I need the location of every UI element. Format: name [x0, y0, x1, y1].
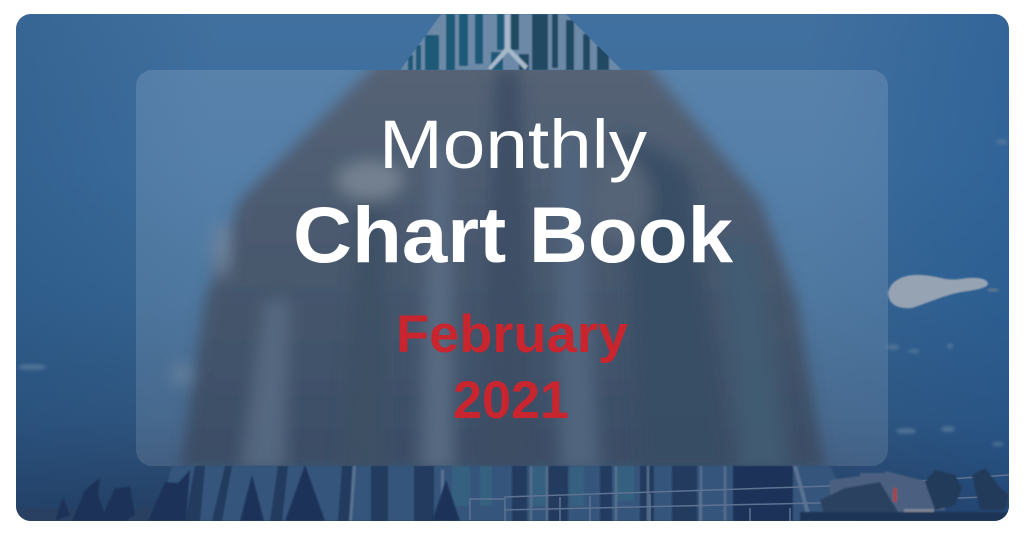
blurred building behind panel: [173, 55, 825, 470]
building base: [157, 466, 858, 521]
small distant clouds: [18, 139, 1008, 446]
frosted panel: [136, 70, 888, 466]
building top: [400, 14, 622, 70]
railing: [470, 475, 1009, 521]
subtitle: 2021: 2021: [453, 371, 569, 430]
subtitle: February: February: [396, 305, 629, 364]
title: Monthly: Monthly: [379, 106, 648, 183]
trees left: [16, 465, 460, 521]
title: Chart Book: Chart Book: [293, 190, 734, 279]
cloud: [888, 275, 999, 308]
distant buildings and trees right: [800, 468, 1009, 521]
